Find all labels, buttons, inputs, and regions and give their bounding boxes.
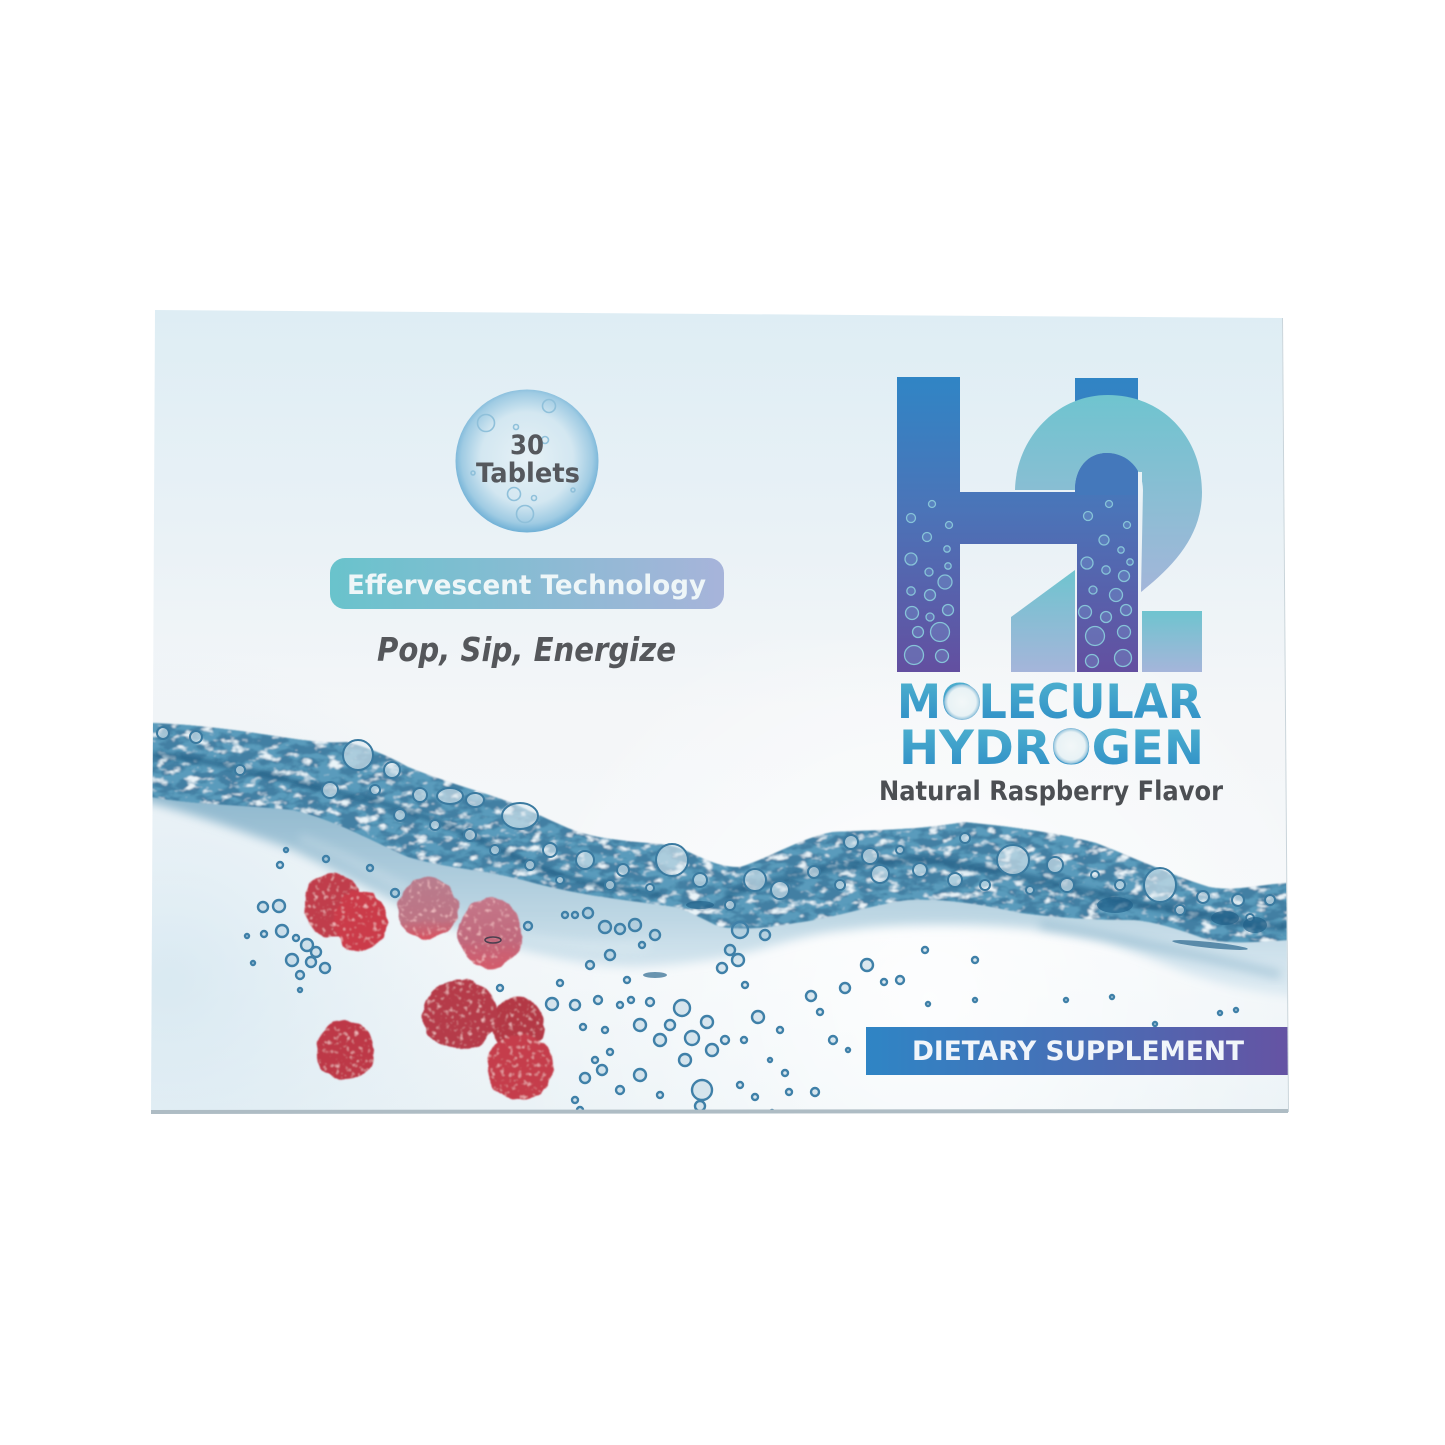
- large crest bubbles: [157, 727, 1275, 922]
- tablet count bubble: [456, 390, 598, 532]
- dietary supplement banner: DIETARY SUPPLEMENT: [912, 1036, 1245, 1067]
- tablets text: Tablets: [476, 458, 580, 489]
- molecular hydrogen wordmark: HYDROGEN: [899, 721, 1204, 776]
- raspberries: [304, 873, 553, 1100]
- product box: [140, 310, 1300, 1115]
- H2 logo: [897, 377, 1202, 672]
- rising bubbles: [245, 848, 1238, 1114]
- molecular hydrogen wordmark: [897, 675, 1204, 776]
- tagline: Pop, Sip, Energize: [377, 630, 676, 669]
- molecular hydrogen wordmark: MOLECULAR: [897, 675, 1202, 730]
- flavor text: Natural Raspberry Flavor: [879, 776, 1224, 807]
- dietary supplement banner: [866, 1027, 1288, 1075]
- dark wave streaks: [643, 897, 1267, 978]
- count text: 30: [510, 430, 544, 461]
- water wave: [140, 723, 1300, 1114]
- bubbles in H: [904, 500, 1133, 668]
- pill: effervescent technology: [330, 558, 724, 609]
- pill: effervescent technology: Effervescent Technology: [347, 570, 706, 601]
